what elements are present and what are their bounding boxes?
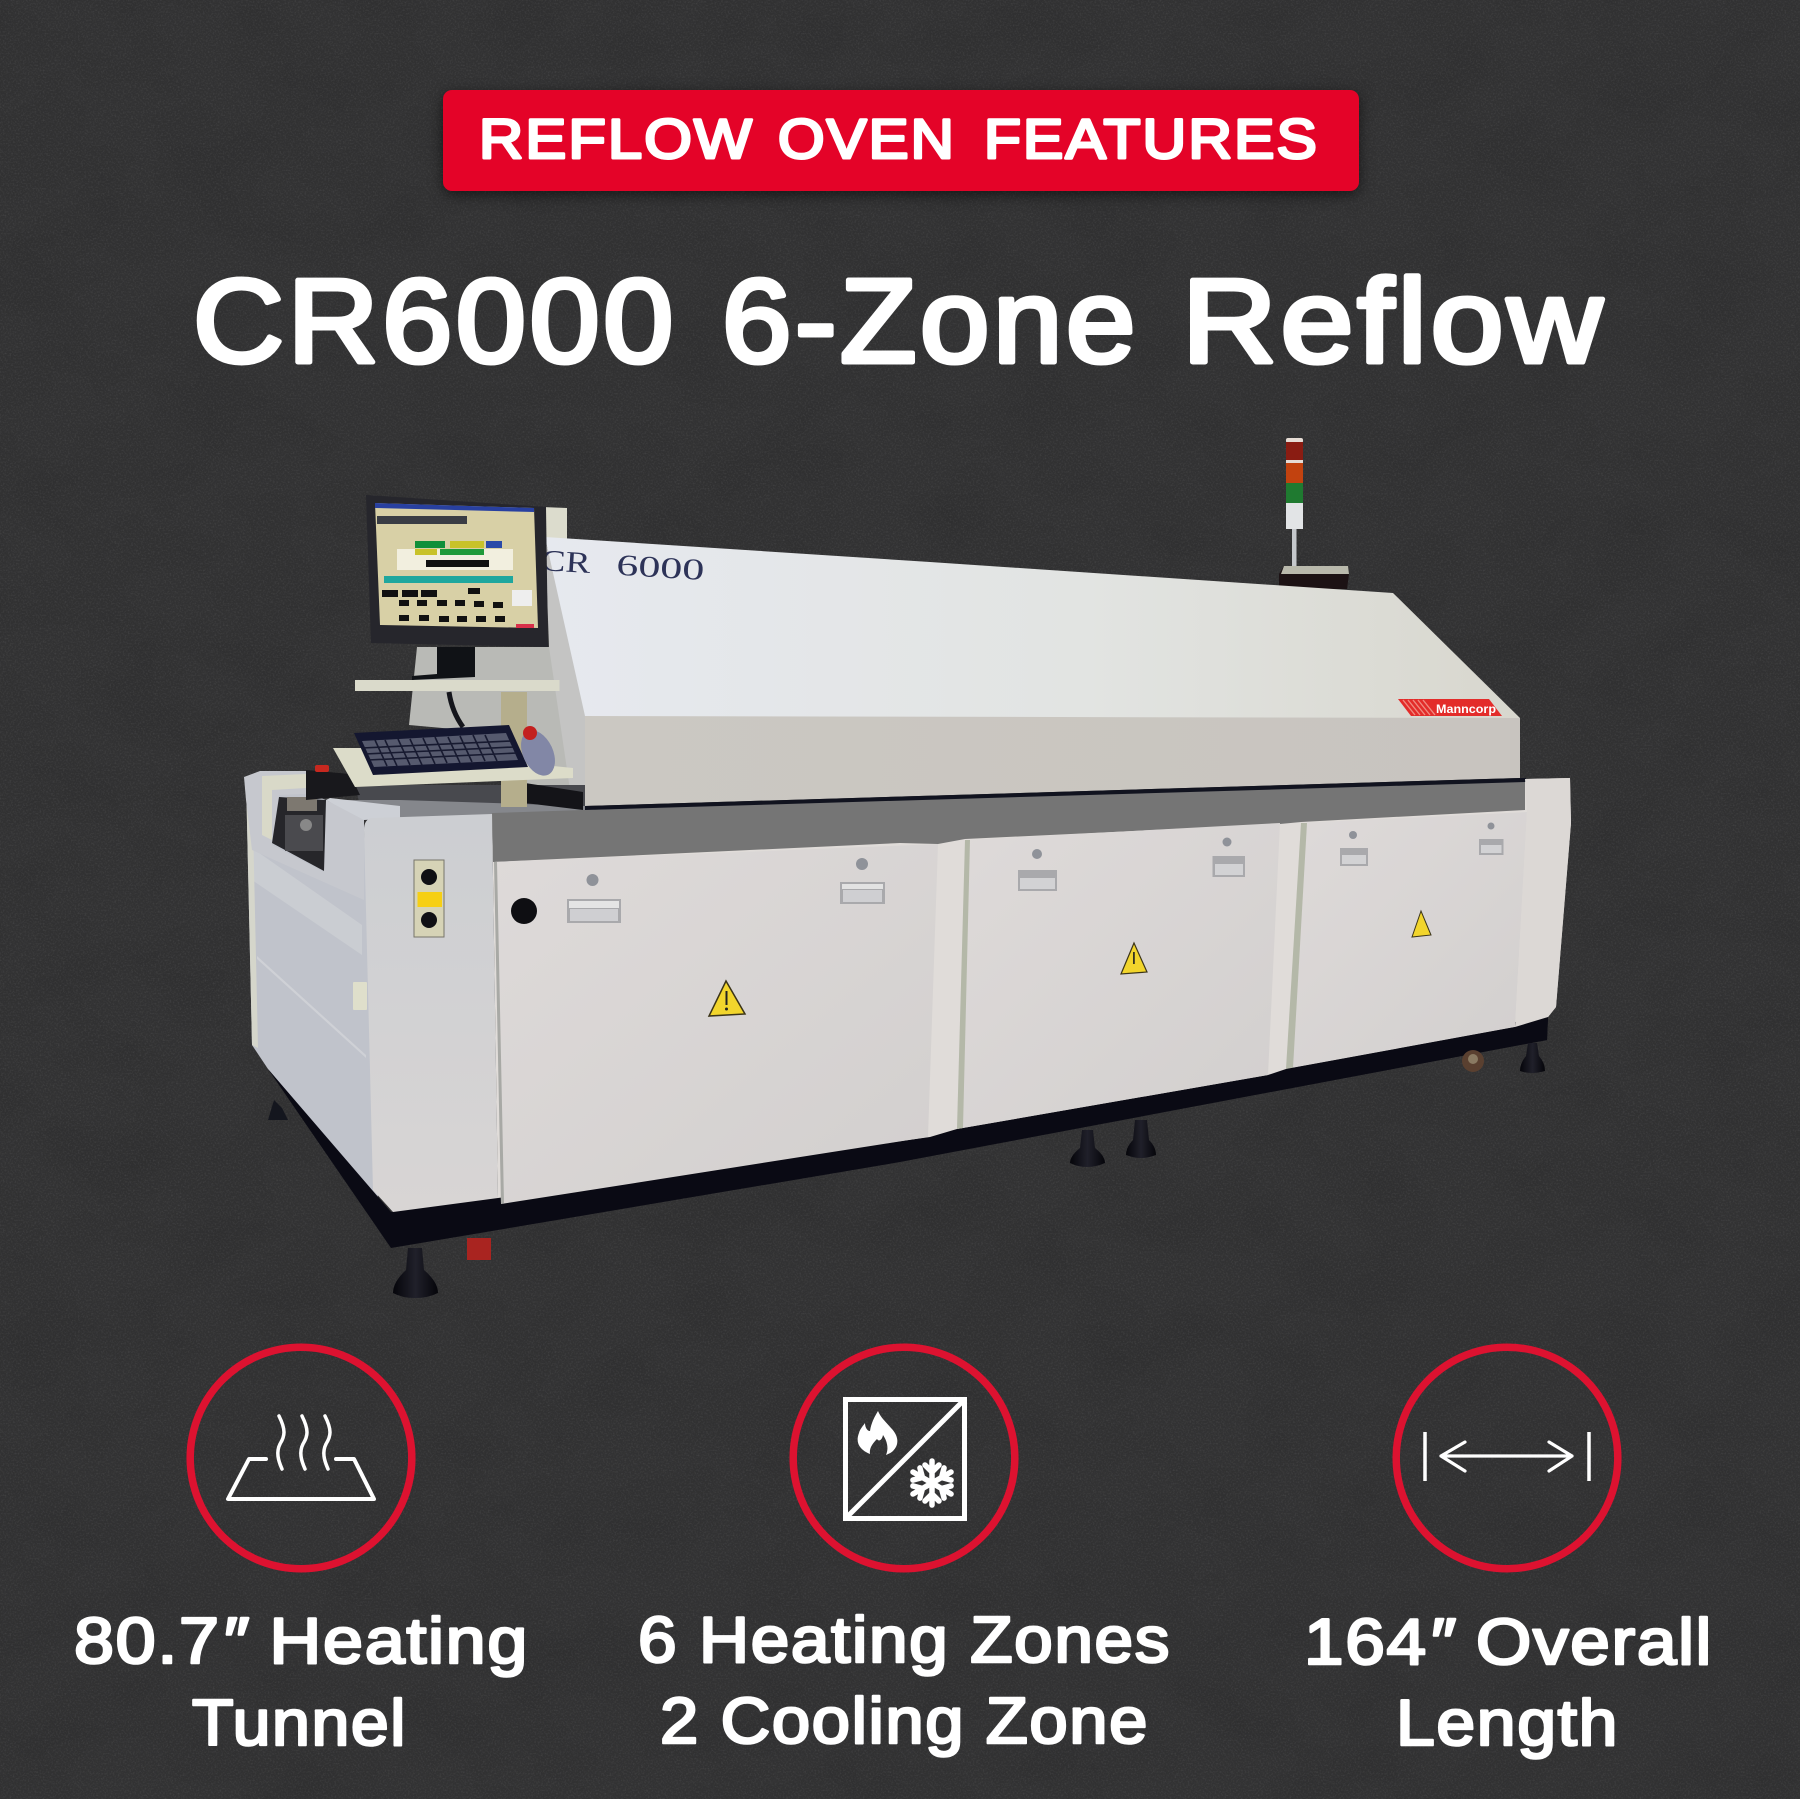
left module side face [244, 771, 400, 1200]
power button [511, 898, 537, 924]
grey column behind monitor [409, 647, 585, 795]
feature: overall length [1304, 1347, 1733, 1759]
hood of oven [540, 537, 1520, 806]
keyboard tray [333, 748, 573, 787]
monitor stand [412, 647, 475, 680]
feature: heating tunnel [74, 1347, 549, 1759]
heading banner: Reflow Oven Features [443, 90, 1359, 191]
Manncorp logo plate: Manncorp [1436, 702, 1496, 716]
label: 164" Overall Length: 164″ Overall [1304, 1605, 1691, 1678]
warning triangle [1412, 911, 1431, 937]
under-tray mechanism [525, 783, 583, 810]
levelling feet and caster [268, 1043, 1545, 1298]
monitor with control software screen [366, 495, 548, 647]
keyboard tray and equipment [306, 680, 583, 810]
plinth patch under right end [1286, 1017, 1548, 1088]
grey belt strip [492, 779, 1525, 862]
title: CR6000 6-Zone Reflow: 6-Zone [722, 255, 1139, 388]
label: 80.7" Heating Tunnel: Tunnel [192, 1686, 407, 1759]
door 1 [494, 844, 938, 1204]
corner panel [364, 814, 498, 1212]
title: CR6000 6-Zone Reflow: CR6000 [193, 255, 677, 388]
icon: heated tray in red circle [190, 1347, 412, 1569]
reflow oven machine illustration [244, 438, 1571, 1298]
label: 6 Heating Zones 2 Cooling Zone: 6 Heating Zones [638, 1603, 1171, 1676]
door handles [567, 882, 885, 923]
keyboard [354, 725, 528, 775]
support post [501, 692, 527, 807]
printed model name CR 6000: 6000 [615, 549, 705, 587]
door 2 [957, 823, 1280, 1129]
label: 164" Overall Length: Length [1396, 1686, 1619, 1759]
rear post [542, 507, 567, 545]
label: 6 Heating Zones 2 Cooling Zone: 2 Cooling Zone [660, 1684, 1149, 1757]
Manncorp logo plate [1398, 699, 1502, 716]
title: CR6000 6-Zone Reflow: Reflow [1182, 255, 1606, 388]
right end panel edge [1515, 778, 1571, 1027]
printed model name CR 6000: CR [540, 544, 591, 580]
label: 80.7" Heating Tunnel: 80.7″ Heating [74, 1604, 502, 1677]
rear conveyor deck [326, 800, 600, 818]
icon: dimension arrow in red circle [1396, 1347, 1618, 1569]
feature: heating and cooling zones [638, 1347, 1191, 1757]
upper shelf [355, 680, 560, 691]
cabinet backing [492, 778, 1571, 1198]
base plinth [268, 1000, 1548, 1248]
stack light tower [1279, 438, 1349, 589]
hood shadow line [585, 778, 1526, 810]
mouse [514, 725, 562, 781]
area beneath keyboard tray [355, 785, 585, 806]
heading banner: Reflow Oven Features: FEATURES [984, 107, 1319, 170]
icon: flame and snowflake in red circle [793, 1347, 1015, 1569]
conveyor opening with mechanism [272, 797, 326, 871]
warning triangle [709, 981, 745, 1016]
warning triangle [1121, 943, 1147, 974]
heading banner: Reflow Oven Features: REFLOW [479, 107, 754, 170]
door 3 [1286, 812, 1527, 1069]
heading banner: Reflow Oven Features: OVEN [778, 107, 956, 170]
control panel with knobs [414, 860, 444, 937]
